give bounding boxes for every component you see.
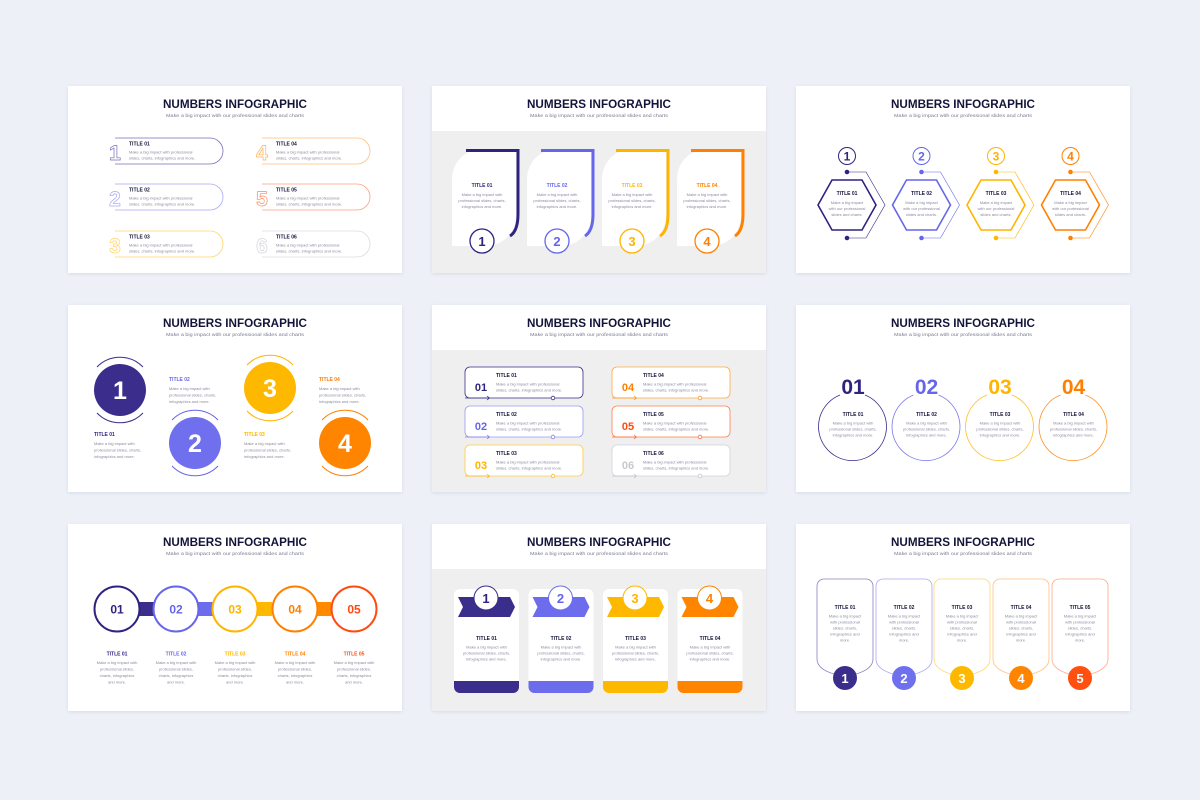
heading: Make a big impact with our professional slides and charts — [894, 113, 1033, 118]
heading: Make a big impact with our professional slides and charts — [166, 113, 305, 118]
card 1: Make a big impact with — [466, 644, 507, 650]
circle 4: 4 — [338, 430, 352, 458]
hex 2: Make a big impact — [905, 200, 939, 205]
box 05 — [612, 406, 730, 439]
ring 04: charts, infographics — [278, 673, 312, 678]
slide 3: hexagons — [796, 86, 1130, 273]
card 4: 4 — [703, 234, 711, 249]
box 04: TITLE 04 — [643, 373, 664, 379]
box 02: 02 — [475, 421, 487, 433]
circle 01 — [818, 376, 886, 461]
card 2: Make a big impact with — [537, 192, 577, 197]
slide 5: numbered boxes with arrows — [432, 305, 766, 492]
heading — [891, 99, 1035, 118]
item 5: TITLE 05 — [276, 188, 297, 194]
heading — [527, 537, 671, 556]
ring 01 — [94, 586, 140, 684]
card 3: infographics and more. — [612, 204, 652, 209]
box 01: 01 — [475, 382, 487, 394]
heading: Make a big impact with our professional slides and charts — [530, 113, 669, 118]
box 04: slides, charts, infographics and more. — [643, 388, 709, 392]
circle 2: professional slides, charts, — [169, 392, 216, 398]
tag 1: with professional — [830, 620, 860, 624]
tag 5: more. — [1075, 638, 1085, 642]
circle 01: 01 — [841, 376, 865, 399]
tag 1: Make a big impact — [829, 614, 862, 618]
circle 03: infographics and more. — [980, 432, 1020, 438]
heading: NUMBERS INFOGRAPHIC — [527, 537, 671, 549]
hex 1: Make a big impact — [831, 200, 864, 205]
hex 3: 3 — [993, 150, 1000, 164]
heading — [163, 537, 307, 556]
ring 04: 04 — [288, 602, 302, 616]
hex 1: slides and charts. — [831, 212, 863, 217]
tag 1: more. — [840, 638, 850, 642]
item 5: slides, charts, infographics and more. — [276, 202, 342, 206]
item 4: slides, charts, infographics and more. — [276, 156, 342, 160]
ring 01: professional slides, — [100, 666, 134, 672]
hex 2: TITLE 02 — [911, 191, 932, 197]
tag 5: with professional — [1065, 620, 1095, 624]
hex 3: Make a big impact — [980, 200, 1013, 205]
ring 05: charts, infographics — [337, 673, 371, 678]
ring 04: and more. — [286, 680, 304, 684]
item 4: 4 — [256, 142, 268, 165]
item 3: 3 — [109, 235, 121, 258]
box 03: 03 — [475, 460, 487, 472]
circle 03: professional slides, charts, — [976, 426, 1024, 432]
circle 2: Make a big impact with — [169, 386, 210, 391]
card 3: 3 — [628, 234, 636, 249]
ring 02 — [154, 586, 198, 684]
circle 3: Make a big impact with — [244, 441, 285, 446]
heading: NUMBERS INFOGRAPHIC — [163, 99, 307, 111]
hex 1: 1 — [844, 150, 851, 164]
circle 1: infographics and more. — [94, 454, 135, 459]
card 4: professional slides, charts, — [686, 650, 734, 656]
card 3: professional slides, charts, — [608, 198, 656, 203]
circle 2: TITLE 02 — [169, 377, 190, 383]
card 4: TITLE 04 — [697, 183, 718, 189]
card 1 — [452, 149, 518, 253]
tag 3: 3 — [958, 671, 966, 686]
tag 5: 5 — [1076, 671, 1084, 686]
slide 2: leaf cards — [432, 86, 766, 273]
tag 3 — [934, 579, 990, 690]
box 03 — [465, 445, 583, 478]
ring 02: TITLE 02 — [166, 652, 187, 658]
circle 3 — [244, 355, 296, 459]
item 3: TITLE 03 — [129, 234, 150, 240]
tag 5: Make a big impact — [1064, 614, 1097, 618]
tag 2: 2 — [900, 671, 908, 686]
box 06: slides, charts, infographics and more. — [643, 466, 709, 470]
box 06: 06 — [622, 460, 634, 472]
ring 03: charts, infographics — [218, 673, 252, 678]
heading: NUMBERS INFOGRAPHIC — [163, 537, 307, 549]
item 3 — [109, 231, 223, 258]
heading — [163, 318, 307, 337]
tag 1: TITLE 01 — [835, 605, 856, 611]
slide 6: big numbers over outline circles — [796, 305, 1130, 492]
ring 01: 01 — [110, 602, 124, 616]
tag 2: slides, charts, — [892, 626, 916, 630]
item 5 — [256, 184, 370, 211]
circle 4: infographics and more. — [319, 399, 360, 404]
ring 03: 03 — [228, 602, 242, 616]
heading: Make a big impact with our professional slides and charts — [166, 551, 305, 556]
item 6: slides, charts, infographics and more. — [276, 248, 342, 254]
card 3 — [603, 586, 668, 693]
circle 04: professional slides, charts, — [1050, 426, 1097, 432]
card 3: Make a big impact with — [612, 192, 652, 197]
circle 01: infographics and more. — [833, 432, 873, 438]
box 04: 04 — [622, 382, 635, 394]
item 2 — [109, 184, 223, 211]
circle 03: 03 — [988, 376, 1012, 399]
item 1: TITLE 01 — [129, 142, 150, 148]
heading — [527, 318, 671, 337]
card 2: infographics and more. — [541, 656, 581, 662]
item 4: TITLE 04 — [276, 142, 297, 148]
card 3: Make a big impact with — [615, 644, 656, 650]
ring 05: TITLE 05 — [344, 652, 365, 658]
box 06: TITLE 06 — [643, 451, 664, 457]
circle 01: TITLE 01 — [843, 412, 864, 418]
circle 02: infographics and more. — [906, 432, 947, 438]
box 05: Make a big impact with professional — [643, 420, 706, 426]
circle 3: infographics and more. — [244, 454, 285, 459]
circle 4: Make a big impact with — [319, 386, 360, 391]
card 1: 1 — [478, 234, 486, 249]
heading: NUMBERS INFOGRAPHIC — [891, 537, 1035, 549]
tag 2: with professional — [889, 620, 919, 624]
tag 4: 4 — [1017, 671, 1025, 686]
card 2: professional slides, charts, — [533, 198, 581, 203]
heading: Make a big impact with our professional slides and charts — [530, 332, 669, 337]
ring 04: TITLE 04 — [285, 652, 306, 658]
circle 02: TITLE 02 — [916, 412, 937, 418]
box 02 — [465, 406, 583, 439]
heading: NUMBERS INFOGRAPHIC — [891, 318, 1035, 330]
box 04 — [612, 367, 730, 400]
circle 2: infographics and more. — [169, 399, 210, 404]
ring 02: Make a big impact with — [156, 660, 196, 665]
card 3: infographics and more. — [615, 656, 656, 662]
tag 3: infographics and — [947, 632, 977, 636]
hex 1 — [818, 148, 885, 240]
hex 3 — [967, 148, 1034, 240]
tag 5: TITLE 05 — [1070, 605, 1091, 611]
item 3: Make a big impact with professional — [129, 242, 192, 248]
card 2 — [527, 149, 593, 253]
heading — [163, 99, 307, 118]
tag 1: 1 — [841, 671, 849, 686]
hex 4 — [1042, 148, 1108, 240]
hex 4: 4 — [1067, 150, 1074, 164]
circle 1: professional slides, charts, — [94, 448, 141, 452]
tag 2: TITLE 02 — [894, 605, 915, 611]
card 1: TITLE 01 — [472, 183, 493, 189]
ring 05: and more. — [345, 680, 363, 684]
card 4: professional slides, charts, — [683, 198, 731, 203]
card 3: professional slides, charts, — [612, 650, 659, 656]
hex 1: with our professional — [829, 206, 865, 211]
box 01: TITLE 01 — [496, 373, 517, 379]
item 6 — [256, 231, 370, 258]
item 4 — [256, 138, 370, 165]
card 1: infographics and more. — [462, 204, 502, 209]
heading: NUMBERS INFOGRAPHIC — [527, 99, 671, 111]
hex 2: 2 — [918, 150, 925, 164]
item 1: Make a big impact with professional — [129, 150, 192, 154]
box 02: slides, charts, infographics and more. — [496, 426, 562, 432]
ring 01: TITLE 01 — [107, 652, 128, 658]
item 3: slides, charts, infographics and more. — [129, 248, 195, 254]
item 5: 5 — [256, 188, 268, 211]
circle 03: Make a big impact with — [980, 420, 1020, 426]
tag 3: slides, charts, — [950, 626, 974, 630]
box 03: TITLE 03 — [496, 451, 517, 457]
tag 4 — [993, 579, 1049, 690]
item 4: Make a big impact with professional — [276, 150, 339, 154]
ring 02: charts, infographics — [159, 673, 193, 678]
item 2: 2 — [109, 188, 121, 211]
tag 1: infographics and — [830, 632, 860, 636]
circle 1: 1 — [113, 377, 127, 405]
hex 2: slides and charts. — [906, 212, 937, 217]
circle 3: 3 — [263, 375, 277, 403]
heading: Make a big impact with our professional slides and charts — [894, 332, 1033, 337]
box 06 — [612, 445, 730, 478]
card 2: 2 — [553, 234, 561, 249]
ring 03 — [212, 586, 258, 684]
box 01 — [465, 367, 583, 400]
item 6: 6 — [256, 235, 268, 258]
box 02: TITLE 02 — [496, 412, 517, 418]
ring 03: professional slides, — [218, 666, 252, 672]
circle 3: professional slides, charts, — [244, 448, 291, 452]
card 4 — [677, 149, 743, 253]
card 2: TITLE 02 — [551, 636, 572, 642]
hex 4: with our professional — [1052, 206, 1089, 211]
circle 02: 02 — [915, 376, 938, 399]
box 03: Make a big impact with professional — [496, 460, 559, 464]
hex 4: slides and charts. — [1055, 212, 1086, 217]
circle 02: professional slides, charts, — [903, 426, 950, 432]
hex 2 — [892, 148, 960, 240]
ring 05: Make a big impact with — [334, 660, 374, 665]
circle 04: 04 — [1062, 376, 1085, 399]
hex 3: TITLE 03 — [986, 191, 1007, 197]
circle 04 — [1039, 376, 1107, 461]
box 04: Make a big impact with professional — [643, 382, 706, 386]
hex 3: slides and charts. — [980, 212, 1012, 217]
card 2: TITLE 02 — [547, 183, 568, 189]
card 4: infographics and more. — [687, 204, 727, 209]
heading: Make a big impact with our professional slides and charts — [530, 551, 669, 556]
item 6: Make a big impact with professional — [276, 242, 339, 248]
ring 04: Make a big impact with — [275, 660, 315, 665]
tag 4: TITLE 04 — [1011, 605, 1032, 611]
circle 2: 2 — [188, 430, 202, 458]
item 2: slides, charts, infographics and more. — [129, 202, 195, 206]
ring 01: Make a big impact with — [97, 660, 137, 665]
ring 04 — [272, 586, 318, 684]
card 1: professional slides, charts, — [463, 650, 510, 656]
circle 4: professional slides, charts, — [319, 392, 366, 398]
slide 8: ribbon cards — [432, 524, 766, 711]
tag 5: slides, charts, — [1068, 626, 1092, 630]
circle 04: TITLE 04 — [1063, 412, 1084, 418]
card 1: 1 — [482, 591, 490, 606]
tag 3: with professional — [947, 620, 977, 624]
slide 9: tag shapes with bottom number circles — [796, 524, 1130, 711]
item 2: TITLE 02 — [129, 188, 150, 194]
box 02: Make a big impact with professional — [496, 420, 559, 426]
item 1: slides, charts, infographics and more. — [129, 156, 195, 160]
card 1: professional slides, charts, — [458, 198, 506, 203]
card 4: Make a big impact with — [690, 644, 730, 650]
ring 01: and more. — [108, 680, 126, 684]
tag 2: more. — [899, 638, 909, 642]
box 05: 05 — [622, 421, 634, 433]
ring 05: professional slides, — [337, 666, 371, 672]
card 2: infographics and more. — [537, 204, 577, 209]
hex 3: with our professional — [978, 206, 1014, 211]
card 2: professional slides, charts, — [537, 650, 585, 656]
box 01: Make a big impact with professional — [496, 382, 559, 386]
card 2: Make a big impact with — [541, 644, 581, 650]
box 06: Make a big impact with professional — [643, 460, 706, 464]
tag 4: Make a big impact — [1005, 614, 1038, 618]
item 1: 1 — [109, 142, 121, 165]
card 4: Make a big impact with — [687, 192, 727, 197]
circle 02: Make a big impact with — [906, 420, 947, 426]
card 3: 3 — [631, 591, 639, 606]
item 5: Make a big impact with professional — [276, 196, 339, 200]
ring 04: professional slides, — [278, 666, 312, 672]
card 4: 4 — [706, 591, 714, 606]
tag 4: slides, charts, — [1009, 626, 1033, 630]
card 2 — [528, 586, 594, 693]
slide 1: outlined numbers list — [68, 86, 402, 273]
tag 5 — [1052, 579, 1108, 690]
circle 4: TITLE 04 — [319, 377, 340, 383]
tag 1 — [817, 579, 873, 690]
circle 03: TITLE 03 — [990, 412, 1011, 418]
slide 4: staggered filled circles — [68, 305, 402, 492]
circle 4 — [319, 377, 371, 476]
ring 05: 05 — [347, 602, 361, 616]
item 6: TITLE 06 — [276, 234, 297, 240]
box 05: slides, charts, infographics and more. — [643, 426, 709, 432]
circle 03 — [966, 376, 1034, 461]
ring 03: TITLE 03 — [225, 652, 246, 658]
tag 2 — [876, 579, 932, 690]
card 3 — [602, 149, 668, 253]
circle 04: Make a big impact with — [1053, 420, 1094, 426]
circle 3: TITLE 03 — [244, 432, 265, 438]
ring 05 — [332, 586, 376, 684]
heading: NUMBERS INFOGRAPHIC — [163, 318, 307, 330]
card 1: Make a big impact with — [462, 192, 502, 197]
circle 01: Make a big impact with — [833, 420, 873, 426]
heading: Make a big impact with our professional slides and charts — [166, 332, 305, 337]
ring 03: Make a big impact with — [215, 660, 255, 665]
card 3: TITLE 03 — [622, 183, 643, 189]
hex 4: TITLE 04 — [1060, 191, 1081, 197]
card 1: TITLE 01 — [476, 636, 497, 642]
heading: NUMBERS INFOGRAPHIC — [527, 318, 671, 330]
slide 7: chained ring circles — [68, 524, 402, 711]
card 4 — [678, 586, 742, 693]
circle 04: infographics and more. — [1053, 432, 1094, 438]
card 2: 2 — [557, 591, 564, 606]
circle 02 — [892, 376, 960, 461]
hex 4: Make a big impact — [1054, 200, 1088, 205]
card 1: infographics and more. — [466, 656, 507, 662]
tag 4: with professional — [1006, 620, 1036, 624]
ring 02: professional slides, — [159, 666, 193, 672]
tag 5: infographics and — [1065, 632, 1095, 636]
hex 1: TITLE 01 — [837, 191, 858, 197]
tag 3: more. — [957, 638, 967, 642]
tag 4: infographics and — [1006, 632, 1036, 636]
box 01: slides, charts, infographics and more. — [496, 388, 562, 392]
tag 4: more. — [1016, 638, 1026, 642]
circle 1 — [94, 357, 146, 459]
card 4: infographics and more. — [690, 656, 730, 662]
tag 3: Make a big impact — [946, 614, 979, 618]
heading — [891, 537, 1035, 556]
tag 3: TITLE 03 — [952, 605, 973, 611]
tag 2: Make a big impact — [888, 614, 921, 618]
heading — [891, 318, 1035, 337]
circle 2 — [169, 377, 221, 476]
circle 1: Make a big impact with — [94, 441, 135, 446]
ring 03: and more. — [226, 680, 244, 684]
heading: NUMBERS INFOGRAPHIC — [891, 99, 1035, 111]
heading — [527, 99, 671, 118]
ring 02: 02 — [169, 602, 183, 616]
box 05: TITLE 05 — [643, 412, 664, 418]
hex 2: with our professional — [903, 206, 940, 211]
heading: Make a big impact with our professional slides and charts — [894, 551, 1033, 556]
card 3: TITLE 03 — [625, 636, 646, 642]
tag 1: slides, charts, — [833, 626, 857, 630]
connectors — [138, 602, 331, 616]
box 03: slides, charts, infographics and more. — [496, 466, 562, 470]
ring 02: and more. — [167, 680, 185, 684]
card 4: TITLE 04 — [700, 636, 721, 642]
circle 1: TITLE 01 — [94, 432, 115, 438]
circle 01: professional slides, charts, — [829, 426, 877, 432]
item 2: Make a big impact with professional — [129, 196, 192, 200]
tag 2: infographics and — [889, 632, 919, 636]
card 1 — [454, 586, 519, 693]
ring 01: charts, infographics — [100, 673, 134, 678]
item 1 — [109, 138, 223, 165]
